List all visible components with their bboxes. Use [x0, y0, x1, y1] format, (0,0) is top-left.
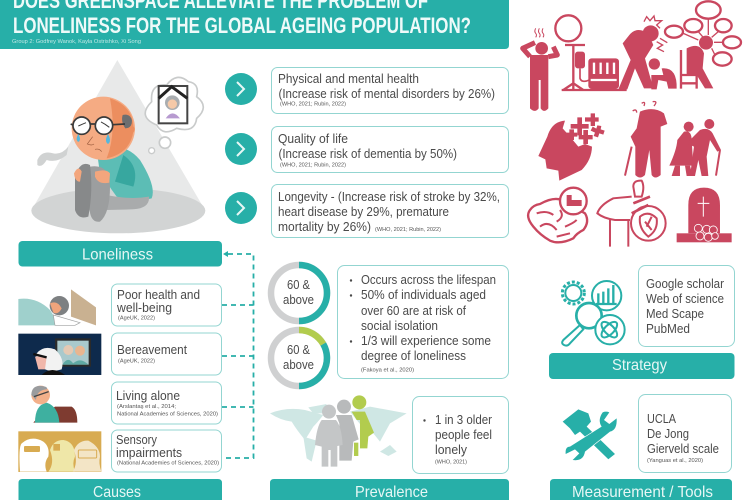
strategy databases box: Med Scape	[646, 306, 704, 321]
donut chart: 50 percent	[271, 265, 327, 321]
consequence: quality of life: (Increase risk of dementia by 50%)	[278, 146, 457, 161]
prevalence facts box: 50% of individuals aged	[361, 287, 486, 302]
donut chart: one third: 60 &	[287, 342, 310, 357]
icon: thumb in brain badge	[567, 195, 582, 206]
cause: poor health and well-being: well-being	[116, 300, 172, 315]
icon: head with puzzle pieces	[538, 113, 605, 181]
icon: brain	[528, 188, 587, 242]
heading: prevalence	[270, 479, 509, 500]
consequence: quality of life: Quality of life	[278, 131, 348, 146]
consequence: physical and mental health: (Increase risk of mental disorders by 26%)	[278, 86, 495, 101]
title banner	[0, 0, 509, 49]
prevalence facts box: Occurs across the lifespan	[361, 272, 496, 287]
heading: loneliness: Loneliness	[82, 246, 153, 264]
heading: loneliness	[18, 241, 222, 266]
measurement tools box	[638, 394, 732, 472]
consequence: longevity: Longevity - (Increase risk of stroke by 32%,	[278, 189, 500, 204]
measurement tools box: Gierveld scale	[647, 441, 719, 456]
icon: man with thought bubbles	[665, 1, 741, 89]
prevalence facts box: over 60 are at risk of	[361, 303, 466, 318]
consequence: physical and mental health	[272, 68, 508, 114]
health impact icons	[523, 1, 741, 247]
consequence: physical and mental health: (WHO, 2021; Rubin, 2022)	[280, 102, 346, 108]
cause: living alone: Living alone	[116, 388, 180, 403]
cause: sensory impairments	[112, 430, 222, 472]
lonely statistic box: lonely	[435, 442, 467, 457]
icon: man in pain	[618, 16, 667, 89]
icon: hospital bed and drip	[562, 45, 627, 90]
lonely statistic box: (WHO, 2021)	[435, 460, 467, 466]
dashed connectors	[222, 254, 254, 458]
icon: gravestone with flowers	[677, 188, 732, 242]
prevalence facts box: degree of loneliness	[361, 348, 466, 363]
donut chart: one third: above	[283, 357, 314, 372]
lonely statistic box: 1 in 3 older	[435, 412, 493, 427]
consequence: physical and mental health: Physical and mental health	[278, 71, 419, 86]
icon: elderly couple	[669, 119, 721, 176]
illustration: lonely elderly man	[31, 60, 205, 233]
cause: sensory impairments: (National Academies of Sciences, 2020)	[117, 460, 219, 466]
world map with older people figures	[270, 395, 407, 467]
measurement tools box: De Jong	[647, 426, 689, 441]
prevalence facts box	[338, 266, 508, 378]
measurement tools box: UCLA	[647, 411, 676, 426]
lonely statistic box: people feel	[435, 427, 492, 442]
donut chart: 50 percent: 60 &	[287, 277, 310, 292]
title banner: LONELINESS FOR THE GLOBAL AGEING POPULATION?	[13, 13, 471, 38]
image: person ill in bed	[18, 289, 96, 325]
image: man living alone in chair	[31, 386, 77, 423]
cause: bereavement: Bereavement	[117, 342, 187, 357]
cause: sensory impairments: impairments	[116, 445, 182, 460]
arrow button 2	[225, 133, 257, 165]
cause: sensory impairments: Sensory	[116, 432, 157, 447]
arrow head: into loneliness	[223, 251, 228, 257]
consequence: longevity: (WHO, 2021; Rubin, 2022)	[375, 227, 441, 233]
icon: hammer and wrench	[563, 409, 617, 460]
heading: measurement and tools	[550, 479, 732, 500]
icon: person hugging knees	[649, 58, 677, 89]
strategy databases box: Web of science	[646, 291, 724, 306]
icon: search strategy magnifier	[562, 281, 625, 346]
cause: living alone: (Arslantaş et al., 2014;	[117, 404, 177, 410]
measurement tools box: (Yanguas et al., 2020)	[647, 458, 703, 464]
icon: stressed man	[523, 15, 581, 111]
cause: living alone: National Academies of Sciences, 2020)	[117, 412, 218, 418]
prevalence facts box: social isolation	[361, 318, 438, 333]
heading: strategy: Strategy	[612, 357, 667, 374]
icon: man with heart	[597, 181, 666, 247]
consequence: longevity	[272, 184, 508, 238]
prevalence facts box: 1/3 will experience some	[361, 333, 491, 348]
strategy databases box: Google scholar	[646, 276, 725, 291]
title banner: Group 2: Godfrey Wanok, Kayla Ostrishko, Xi Song	[12, 39, 141, 45]
donut chart: one third	[271, 330, 327, 386]
consequence: quality of life: (WHO, 2021; Rubin, 2022)	[280, 162, 346, 168]
cause: poor health and well-being	[112, 284, 222, 326]
icon: confused elder with cane	[625, 101, 667, 177]
image: sensory impairments	[18, 431, 101, 472]
consequence: longevity: mortality by 26%)	[278, 219, 371, 234]
heading: strategy	[549, 353, 734, 379]
arrow button 1	[225, 73, 257, 105]
cause: poor health and well-being: (AgeUK, 2022)	[118, 316, 155, 322]
strategy databases box	[638, 266, 734, 346]
strategy databases box: PubMed	[646, 321, 690, 336]
cause: bereavement	[112, 333, 222, 375]
cause: bereavement: (AgeUK, 2022)	[118, 358, 155, 364]
lonely statistic box	[412, 396, 508, 474]
cause: living alone	[112, 382, 222, 424]
image: bereavement, widow looking at photo	[18, 334, 101, 375]
cause: poor health and well-being: Poor health and	[117, 287, 200, 302]
consequence: longevity: heart disease by 29%, premature	[278, 204, 449, 219]
arrow button 3	[225, 192, 257, 224]
consequence: quality of life	[272, 126, 508, 172]
prevalence facts box: (Fakoya et al., 2020)	[361, 368, 414, 374]
donut chart: 50 percent: above	[283, 292, 314, 307]
heading: causes	[18, 479, 222, 500]
